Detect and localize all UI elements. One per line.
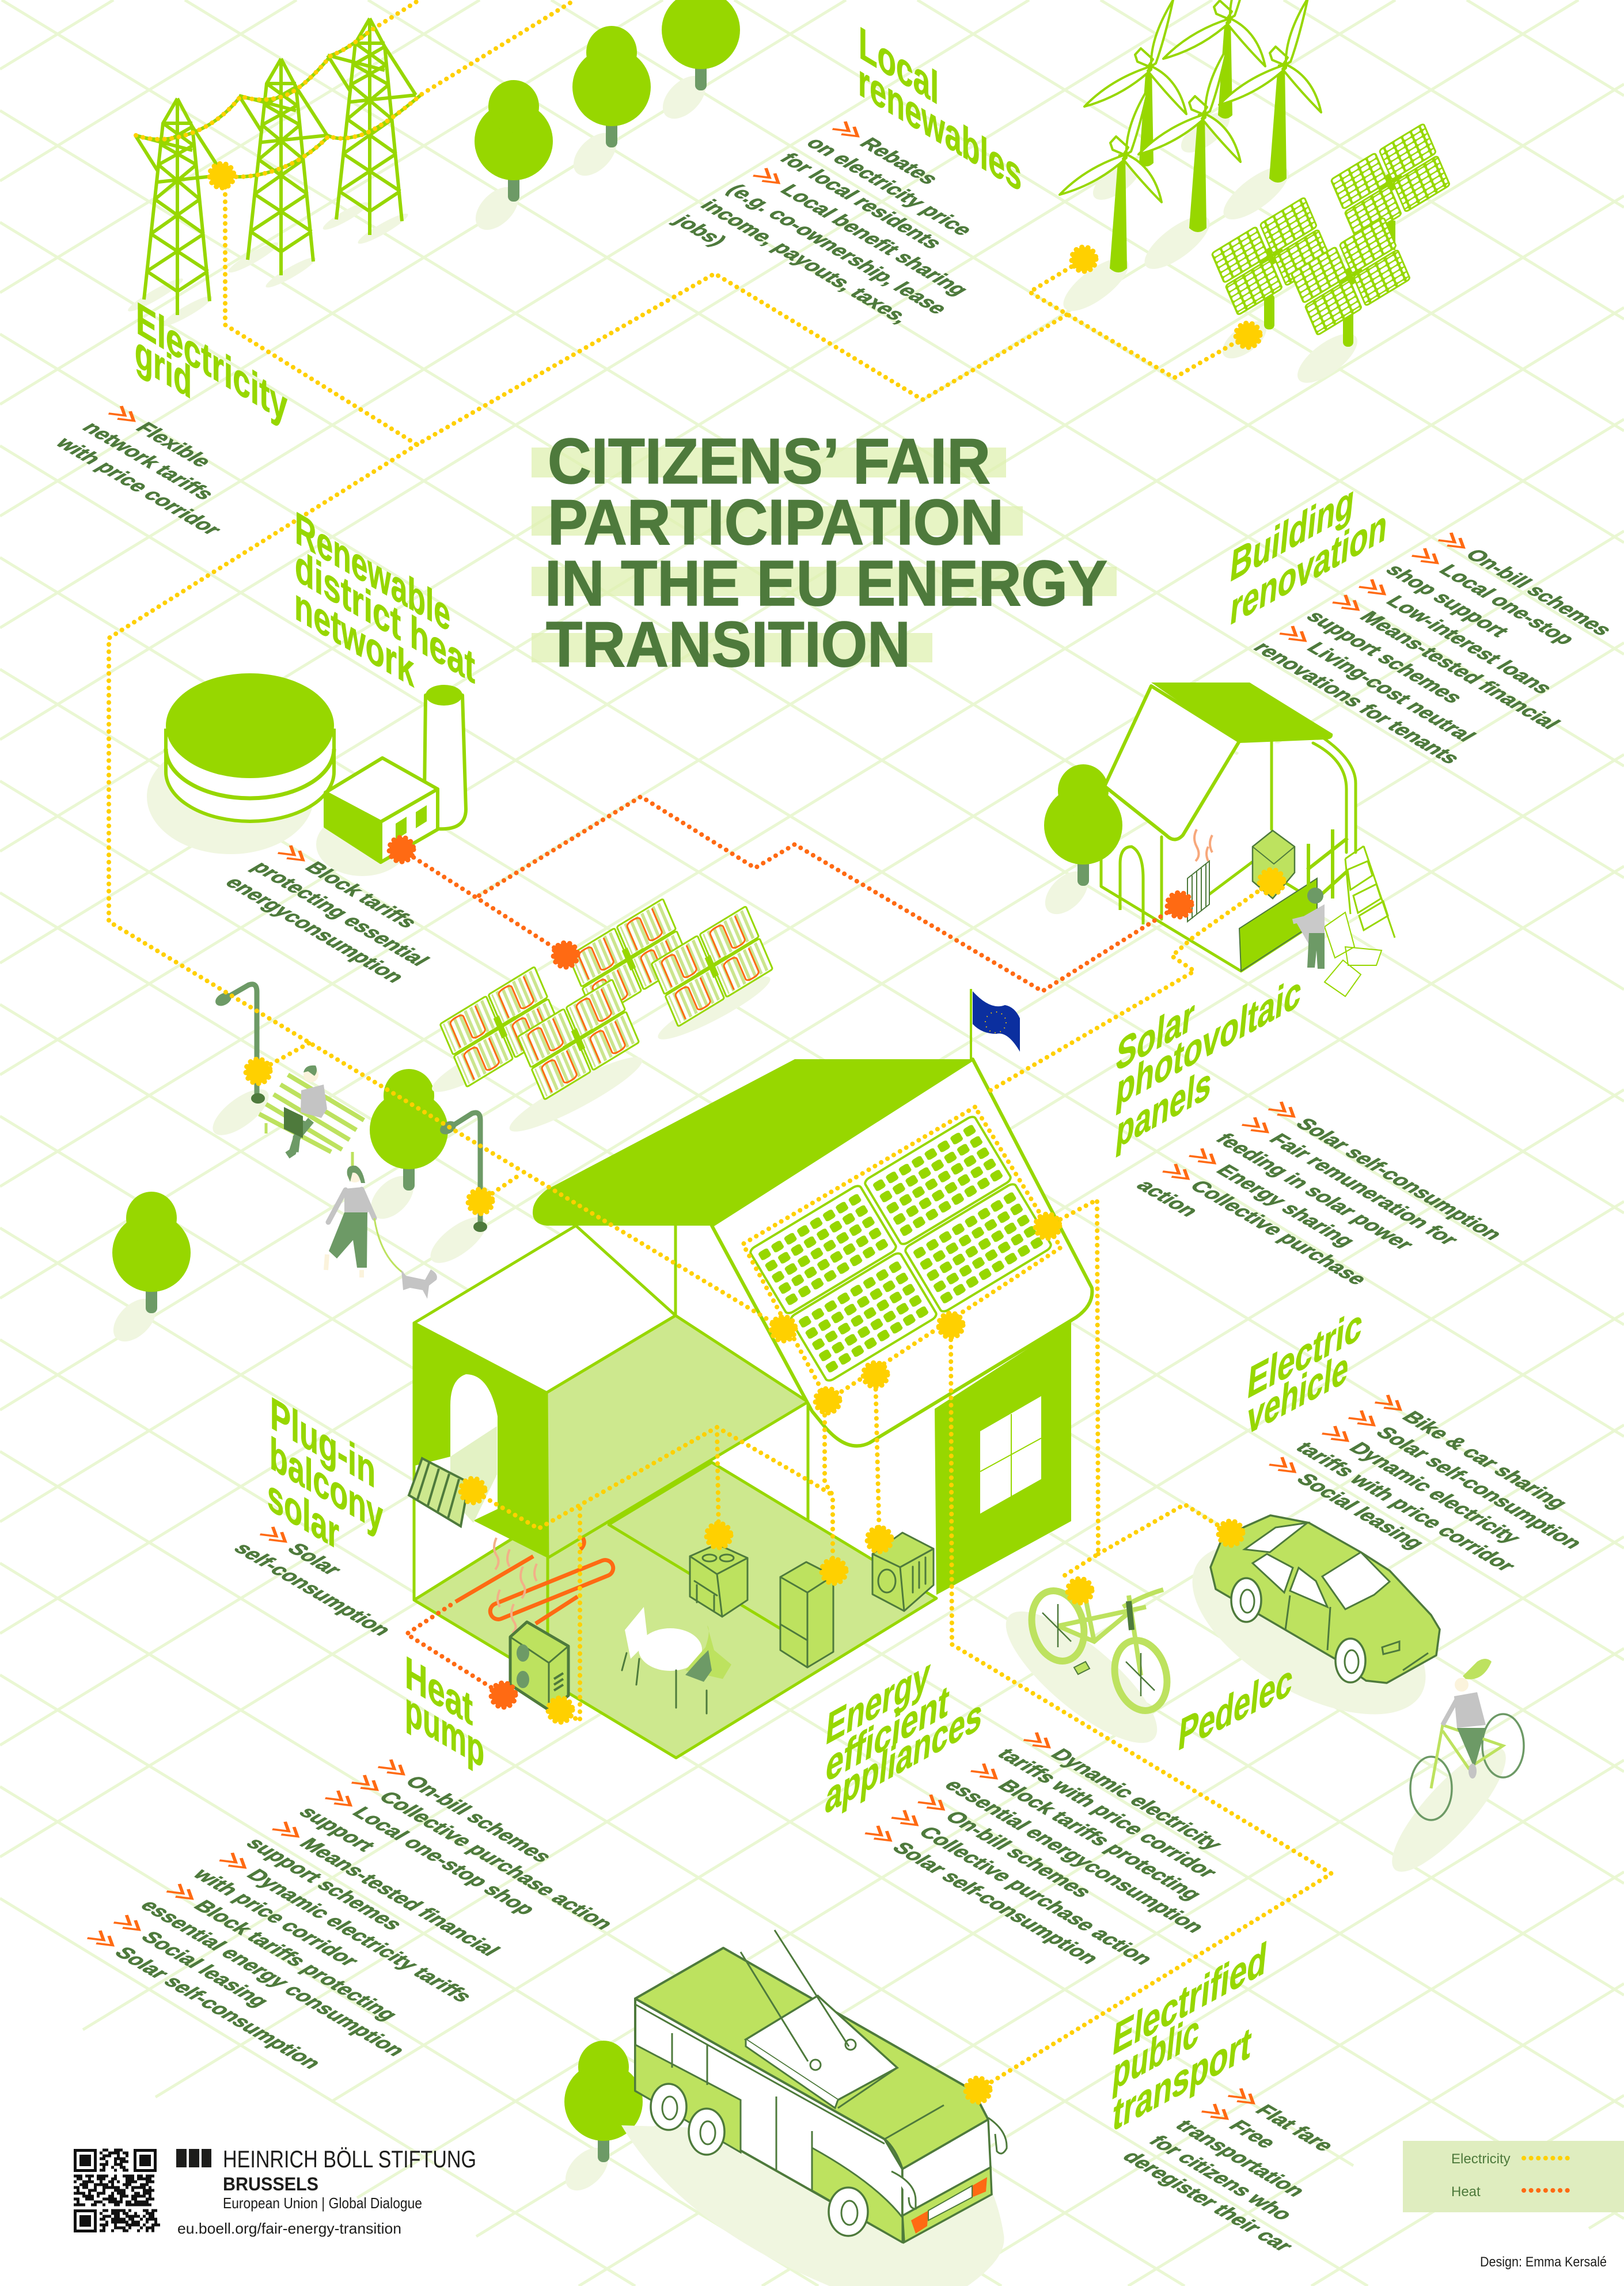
text: Building renovation policies: renovations for tenants xyxy=(1249,639,1466,767)
heading: Heat pump: Heat xyxy=(405,1646,473,1735)
heading: Building renovation: renovation xyxy=(1228,499,1390,635)
text: Energy efficient appliances policies: Collective purchase action xyxy=(913,1824,1159,1967)
text: Local renewables policies: for local residents xyxy=(775,150,948,252)
illustration: street lamps xyxy=(206,984,494,1271)
text: Electric vehicle policies: Social leasing xyxy=(1291,1470,1431,1552)
illustration: electric car xyxy=(1165,1510,1453,1749)
text: Heat pump policies xyxy=(82,1756,649,2090)
text: Building renovation policies: Low-interest loans xyxy=(1381,593,1558,697)
heading: Electricity grid: Electricity xyxy=(136,291,287,433)
illustration: pedelec bike xyxy=(988,1585,1175,1762)
connection nodes xyxy=(210,164,1284,2102)
heading: Pedelec: Pedelec xyxy=(1176,1653,1295,1761)
text: Local renewables policies xyxy=(669,118,1059,348)
heading: Renewable district heat network: district heat xyxy=(295,539,475,693)
text: Heat pump policies: support schemes xyxy=(241,1834,408,1933)
text: Heat pump policies: with price corridor xyxy=(188,1865,365,1969)
text: Energy efficient appliances policies: tariffs with price corridor xyxy=(992,1745,1223,1881)
heading: Electric vehicle xyxy=(1245,1298,1365,1445)
text: Heat pump policies: support xyxy=(294,1803,381,1855)
text: Solar PV policies: Solar self-consumption xyxy=(1291,1115,1508,1243)
legend: Electricity xyxy=(1451,2151,1511,2167)
heading: Solar photovoltaic panels: photovoltaic xyxy=(1114,965,1304,1117)
text: Heat pump policies: Means-tested financial xyxy=(294,1835,506,1959)
heading: Electrified public transport: public xyxy=(1110,2003,1202,2101)
text: Electrified public transport policies: Flat fare xyxy=(1250,2102,1340,2154)
heading: Energy efficient appliances: appliances xyxy=(823,1688,985,1824)
right lime wall xyxy=(935,1321,1071,1595)
heading: Electrified public transport: Electrified xyxy=(1110,1932,1269,2065)
text: Heat pump policies: Collective purchase action xyxy=(374,1788,619,1932)
heading: Building renovation: Building xyxy=(1228,473,1357,592)
text: Solar PV policies: Fair remuneration for xyxy=(1264,1131,1464,1248)
heading: Plug-in balcony solar: solar xyxy=(267,1468,339,1560)
text: Solar PV policies: action xyxy=(1131,1177,1204,1220)
text: Solar PV policies: Energy sharing xyxy=(1211,1162,1361,1250)
text: Energy efficient appliances policies: essential energyconsumption xyxy=(939,1776,1211,1936)
text: Building renovation policies: support schemes xyxy=(1301,608,1469,706)
text: Energy efficient appliances policies: Solar self-consumption xyxy=(887,1839,1105,1967)
worker xyxy=(1293,888,1325,969)
heading: Energy efficient appliances: Energy xyxy=(824,1647,932,1755)
text: Heat pump policies: Social leasing xyxy=(136,1928,275,2010)
logo: Heinrich Böll Stiftung Brussels: eu.boell.org/fair-energy-transition xyxy=(177,2220,401,2237)
heating loop xyxy=(456,1538,584,1624)
lime side wall with balcony arch xyxy=(414,1323,548,1558)
title xyxy=(532,426,1117,680)
heat network lines xyxy=(401,797,1179,1695)
text: Electricity grid policies: network tariffs xyxy=(77,419,220,503)
text: Local renewables policies: income, payouts, taxes, xyxy=(695,196,916,327)
illustration: cyclist xyxy=(1377,1659,1524,1886)
credit: Design: Emma Kersalé xyxy=(1480,2254,1607,2270)
illustration: EU flag xyxy=(971,989,1020,1059)
text: Electrified public transport policies: deregister their car xyxy=(1117,2148,1299,2254)
text: Building renovation policies: Local one-stop xyxy=(1434,562,1581,648)
illustration: electric bus xyxy=(621,1930,1007,2286)
text: Heat pump policies: Dynamic electricity tariffs xyxy=(242,1866,478,2005)
text: Local renewables policies: Rebates xyxy=(855,135,944,187)
text: District heat policies: protecting essential xyxy=(246,858,435,969)
table and chairs xyxy=(625,1607,648,1659)
heading: Electrified public transport xyxy=(1110,1932,1269,2141)
heading: Plug-in balcony solar: balcony xyxy=(270,1427,383,1543)
text: District heat policies: Block tariffs xyxy=(300,859,423,931)
text: District heat policies xyxy=(220,843,463,985)
heading: Plug-in balcony solar xyxy=(267,1387,383,1560)
text: Local renewables policies: jobs) xyxy=(669,211,732,249)
illustration: heat collector panels xyxy=(427,899,776,1142)
text: Local renewables policies: on electricity price xyxy=(801,134,978,238)
heading: Renewable district heat network: Renewable xyxy=(295,502,450,642)
heading: Electric vehicle: Electric xyxy=(1245,1298,1365,1409)
logo: Heinrich Böll Stiftung Brussels: European Union | Global Dialogue xyxy=(223,2194,422,2212)
logo: Heinrich Böll Stiftung Brussels: HEINRICH BÖLL STIFTUNG xyxy=(223,2145,476,2173)
text: Energy efficient appliances policies xyxy=(860,1730,1291,1983)
illustration: small renovated house xyxy=(1101,683,1395,996)
heading: Electric vehicle: vehicle xyxy=(1245,1340,1351,1445)
text: Solar PV policies: Collective purchase xyxy=(1185,1177,1373,1288)
text: Heat pump policies: Local one-stop shop xyxy=(347,1804,541,1918)
text: Electric vehicle policies: Dynamic electricity xyxy=(1344,1439,1527,1546)
illustration: main house xyxy=(409,1059,1092,1758)
logo: Heinrich Böll Stiftung Brussels: BRUSSELS xyxy=(223,2174,318,2194)
text: Electricity grid policies: Flexible xyxy=(131,419,218,470)
text: Building renovation policies xyxy=(1249,530,1624,779)
heading: Building renovation xyxy=(1228,473,1390,635)
heading: Energy efficient appliances: efficient xyxy=(824,1674,951,1792)
illustration: heat pump unit xyxy=(510,1622,568,1710)
text: Electric vehicle policies: Bike & car sharing xyxy=(1397,1408,1573,1512)
illustration: district heat plant xyxy=(147,673,466,876)
text: Local renewables policies: (e.g. co-ownership, lease xyxy=(722,181,953,317)
radiator xyxy=(1187,861,1209,922)
illustration: man on bench xyxy=(259,1066,364,1166)
legend: Heat xyxy=(1451,2184,1481,2200)
roof xyxy=(533,1059,973,1226)
text: Plug-in balcony policies: Solar xyxy=(282,1540,347,1578)
text: Electric vehicle policies: tariffs with price corridor xyxy=(1291,1439,1521,1575)
title: PARTICIPATION xyxy=(548,487,1004,558)
illustration: roof solar panels xyxy=(749,1115,1053,1382)
heading: Heat pump: pump xyxy=(405,1682,484,1778)
outdoor unit xyxy=(1253,831,1295,899)
text: Plug-in balcony policies: self-consumption xyxy=(229,1540,397,1639)
text: District heat policies: energyconsumption xyxy=(220,874,410,985)
text: Building renovation policies: Living-cost neutral xyxy=(1302,639,1481,745)
illustration: appliances xyxy=(622,1533,934,1713)
heading: Electricity grid xyxy=(135,291,287,433)
heading: Solar photovoltaic panels: Solar xyxy=(1114,988,1197,1082)
insulation panel xyxy=(1239,878,1317,971)
text: Electrified public transport policies: transportation xyxy=(1170,2117,1311,2200)
heading: Plug-in balcony solar: Plug-in xyxy=(270,1387,375,1498)
text: Heat pump policies: On-bill schemes xyxy=(400,1773,558,1866)
heading: Heat pump xyxy=(405,1646,484,1778)
text: Energy efficient appliances policies: Block tariffs protecting xyxy=(993,1777,1208,1903)
text: Heat pump policies: essential energy consumption xyxy=(135,1897,411,2059)
heading: Electricity grid: grid xyxy=(135,324,192,409)
heading: Solar photovoltaic panels xyxy=(1114,965,1304,1159)
title: TRANSITION xyxy=(546,609,910,680)
text: Electric vehicle policies xyxy=(1264,1392,1615,1598)
heading: Solar photovoltaic panels: panels xyxy=(1114,1056,1214,1159)
heading: Renewable district heat network: network xyxy=(294,578,414,697)
title: IN THE EU ENERGY xyxy=(545,548,1107,619)
solar roof xyxy=(712,1059,1092,1446)
text: Electrified public transport policies: Free xyxy=(1224,2117,1282,2151)
heading: Local renewables: Local xyxy=(859,16,939,115)
illustration: woman walking dog xyxy=(326,1166,437,1299)
text: Electricity grid policies xyxy=(50,403,280,538)
title: CITIZENS’ FAIR xyxy=(548,426,991,497)
illustration: wind turbines xyxy=(1056,0,1321,320)
text: Heat pump policies: Block tariffs protecting xyxy=(189,1897,404,2023)
illustration: ground solar arrays xyxy=(1212,123,1450,392)
trees xyxy=(105,0,1122,2198)
text: Electrified public transport policies xyxy=(1117,2086,1405,2254)
text: Solar PV policies xyxy=(1131,1099,1508,1321)
heading: Local renewables xyxy=(858,16,1022,202)
text: Heat pump policies: Solar self-consumption xyxy=(109,1944,327,2072)
text: Local renewables policies: Local benefit sharing xyxy=(775,181,974,298)
balcony solar panel xyxy=(409,1458,469,1526)
ladder and stacked panels xyxy=(1345,846,1395,938)
text: Energy efficient appliances policies: On-bill schemes xyxy=(940,1808,1098,1901)
text: Electric vehicle policies: Solar self-consumption xyxy=(1371,1424,1588,1552)
illustration: electricity grid pylons xyxy=(126,18,422,330)
logo: Heinrich Böll Stiftung Brussels xyxy=(176,2145,476,2237)
legend xyxy=(1403,2141,1624,2212)
text: Electricity grid policies: with price corridor xyxy=(50,434,227,538)
heading: Electrified public transport: transport xyxy=(1110,2016,1254,2141)
text: Energy efficient appliances policies: Dynamic electricity xyxy=(1046,1746,1228,1853)
text: Building renovation policies: shop support xyxy=(1380,561,1515,640)
heading: Local renewables: renewables xyxy=(858,53,1022,202)
QR code xyxy=(74,2149,160,2232)
text: Building renovation policies: On-bill schemes xyxy=(1460,546,1618,639)
text: Building renovation policies: Means-tested financial xyxy=(1354,608,1566,732)
text: Electrified public transport policies: for citizens who xyxy=(1144,2132,1299,2223)
text: Solar PV policies: feeding in solar power xyxy=(1211,1130,1420,1253)
electricity network lines xyxy=(109,0,1331,2090)
